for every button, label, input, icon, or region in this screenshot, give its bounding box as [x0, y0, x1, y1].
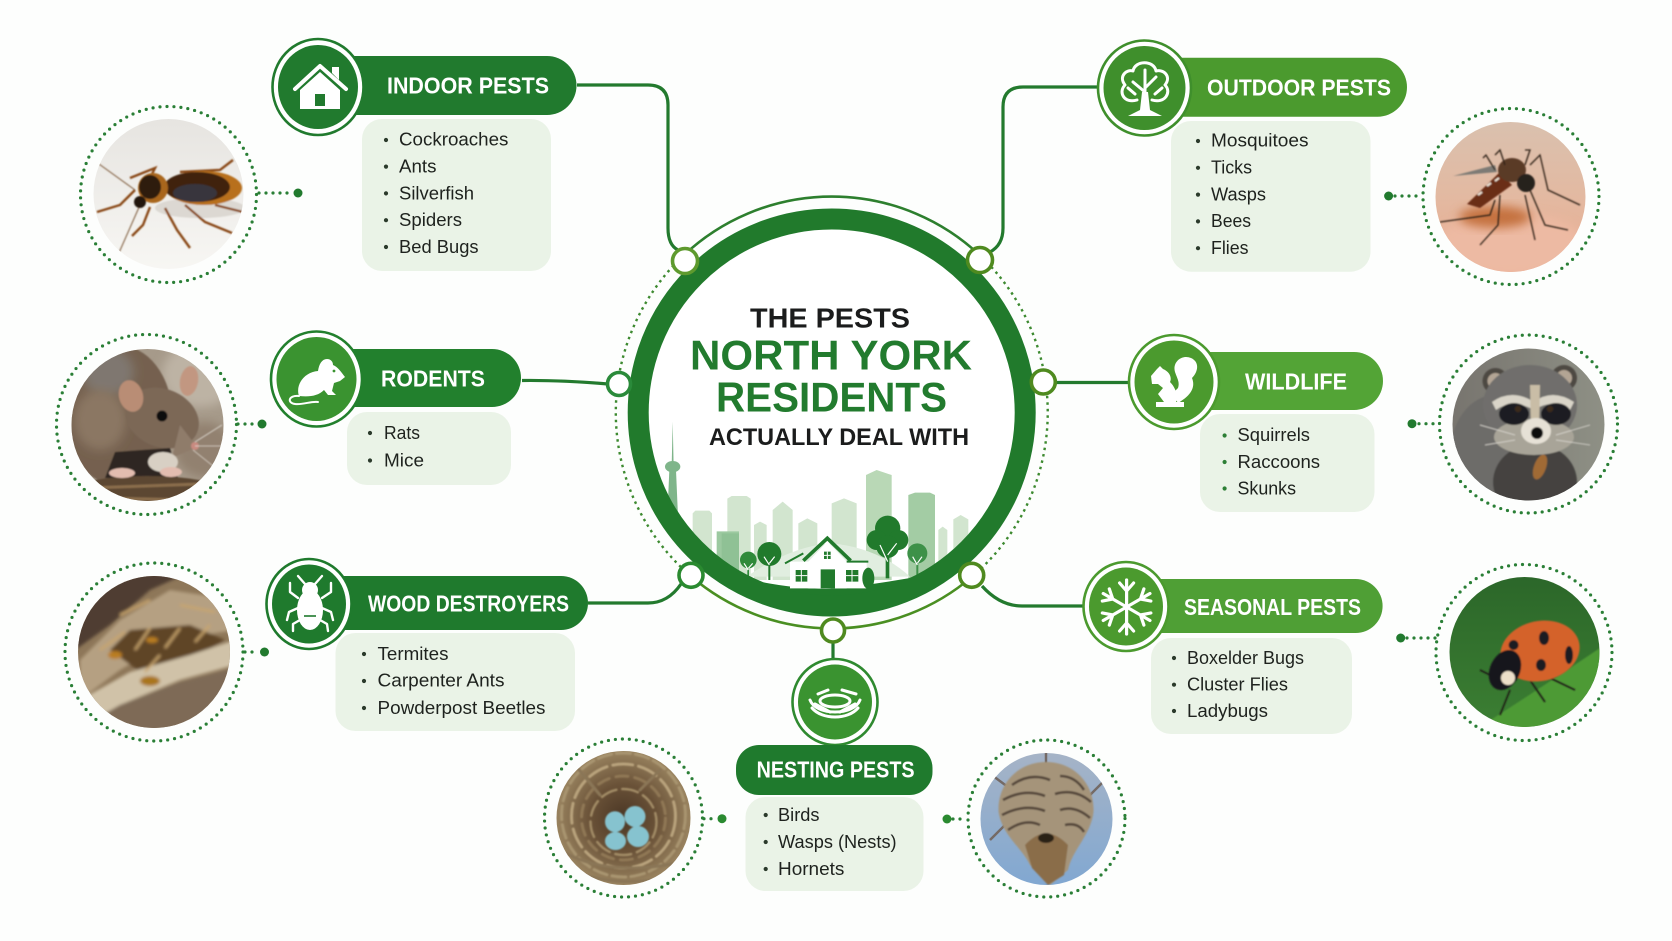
icon: snowflake — [1084, 562, 1168, 651]
list: indoor pests: Bed Bugs — [399, 237, 479, 257]
icon: squirrel — [1129, 335, 1219, 429]
heading: outdoor pests — [1144, 58, 1407, 117]
icon: tree — [1098, 40, 1191, 136]
panel: rodents — [56, 332, 521, 520]
heading: seasonal pests — [1126, 579, 1383, 633]
photo: cockroach — [80, 106, 302, 282]
panel: wood destroyers — [65, 559, 588, 741]
title: RESIDENTS — [716, 374, 947, 421]
house — [785, 538, 874, 589]
list: indoor pests: Spiders — [399, 210, 462, 230]
panel: nesting pests — [544, 659, 1125, 897]
panel: indoor pests — [80, 39, 576, 282]
list: wood destroyers — [336, 633, 575, 731]
heading: nesting pests: NESTING PESTS — [757, 756, 915, 782]
title: THE PESTS — [750, 303, 910, 334]
list: rodents — [347, 412, 511, 485]
list: seasonal pests: Boxelder Bugs — [1187, 648, 1304, 668]
photo: bird nest — [544, 739, 726, 897]
heading: indoor pests — [318, 56, 576, 115]
list: wildlife: Raccoons — [1238, 452, 1320, 472]
panel: seasonal pests — [1084, 562, 1612, 740]
list: seasonal pests: Cluster Flies — [1187, 675, 1288, 695]
heading: rodents — [316, 349, 521, 407]
photo: ladybug — [1396, 564, 1612, 740]
list: wood destroyers: Termites — [378, 644, 448, 664]
heading: seasonal pests: SEASONAL PESTS — [1184, 594, 1361, 620]
photo: hornet nest — [942, 740, 1125, 897]
central hub — [616, 197, 1048, 647]
photo: raccoon — [1408, 335, 1618, 520]
heading: rodents: RODENTS — [381, 366, 485, 392]
panel: wildlife — [1129, 335, 1618, 520]
list: seasonal pests — [1151, 638, 1352, 734]
heading: wood destroyers: WOOD DESTROYERS — [368, 590, 569, 616]
list: wood destroyers: Powderpost Beetles — [378, 698, 546, 718]
list: rodents: Mice — [384, 451, 424, 471]
title: ACTUALLY DEAL WITH — [709, 424, 969, 451]
photo: termite-damaged wood — [65, 563, 269, 741]
panel: outdoor pests — [1098, 40, 1599, 284]
list: outdoor pests: Wasps — [1211, 184, 1266, 204]
list: wood destroyers: Carpenter Ants — [378, 671, 504, 691]
list: outdoor pests — [1171, 121, 1370, 272]
photo: mosquito — [1384, 108, 1599, 284]
connector lines — [522, 85, 1129, 660]
list: rodents: Rats — [384, 423, 420, 443]
list: outdoor pests: Mosquitoes — [1211, 131, 1308, 151]
list: outdoor pests: Ticks — [1211, 158, 1252, 178]
list: outdoor pests: Bees — [1211, 211, 1251, 231]
list: nesting pests: Birds — [778, 805, 820, 825]
list: nesting pests — [746, 797, 924, 891]
list: nesting pests: Hornets — [778, 859, 844, 879]
list: wildlife — [1200, 414, 1374, 512]
list: wildlife: Squirrels — [1238, 425, 1310, 445]
list: outdoor pests: Flies — [1211, 238, 1248, 258]
heading: wildlife: WILDLIFE — [1245, 368, 1347, 394]
hub disc — [646, 226, 1018, 598]
heading: indoor pests: INDOOR PESTS — [387, 72, 549, 98]
list: indoor pests: Cockroaches — [399, 130, 508, 150]
connector nodes — [608, 248, 1055, 642]
heading: wildlife — [1174, 352, 1383, 410]
trees — [740, 516, 927, 580]
list: seasonal pests: Ladybugs — [1187, 701, 1268, 721]
title: NORTH YORK — [690, 331, 972, 378]
icon: beetle — [266, 559, 352, 649]
icon: house — [272, 39, 364, 135]
heading: nesting pests — [736, 745, 932, 795]
list: indoor pests — [362, 119, 551, 271]
photo: rat — [56, 334, 266, 520]
heading: wood destroyers — [309, 576, 588, 630]
list: indoor pests: Ants — [399, 156, 436, 176]
orbit ring — [616, 197, 1048, 628]
skyline illustration — [665, 422, 968, 596]
list: wildlife: Skunks — [1238, 478, 1296, 498]
hub ring — [638, 219, 1025, 606]
ground hill — [762, 578, 910, 596]
icon: mouse — [271, 332, 362, 426]
heading: outdoor pests: OUTDOOR PESTS — [1207, 74, 1391, 100]
icon: nest — [792, 659, 878, 745]
list: nesting pests: Wasps (Nests) — [778, 832, 897, 852]
list: indoor pests: Silverfish — [399, 183, 474, 203]
title — [690, 303, 972, 451]
